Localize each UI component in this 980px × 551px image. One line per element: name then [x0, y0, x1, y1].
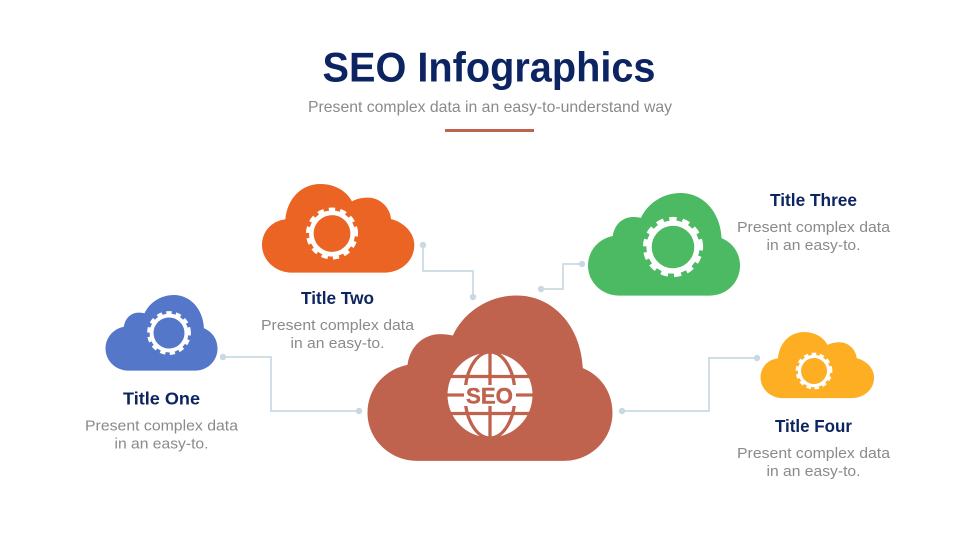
- text block: title four: [737, 416, 891, 480]
- icon: globe: SEO: [466, 384, 513, 408]
- text block: title one: in an easy-to.: [114, 436, 208, 452]
- text block: title two: in an easy-to.: [290, 335, 384, 352]
- icon: globe: [447, 352, 533, 438]
- text block: title one: Present complex data: [85, 418, 239, 434]
- cloud four (yellow) with gear: [760, 332, 874, 398]
- text block: title four: Present complex data: [737, 445, 891, 462]
- title: SEO Infographics: [322, 44, 656, 90]
- text block: title two: Present complex data: [261, 317, 415, 334]
- title underline: [445, 129, 534, 132]
- center cloud with SEO globe: [368, 296, 612, 461]
- text block: title four: in an easy-to.: [766, 463, 860, 480]
- text block: title one: [85, 388, 239, 452]
- connector: cloud one to center: [220, 354, 362, 414]
- text block: title three: Title Three: [770, 190, 857, 210]
- icon: gear: [305, 207, 359, 260]
- cloud three (green) with gear: [588, 193, 740, 296]
- icon: gear: [795, 352, 833, 390]
- connector: cloud two to center: [420, 242, 476, 300]
- connector: cloud three to center: [538, 261, 585, 292]
- text block: title two: Title Two: [301, 288, 374, 308]
- icon: gear: [642, 216, 704, 278]
- connector: cloud four to center: [619, 355, 760, 414]
- text block: title two: [261, 288, 415, 352]
- text block: title four: Title Four: [775, 416, 852, 436]
- icon: gear: [146, 310, 192, 356]
- cloud two (orange) with gear: [262, 184, 414, 273]
- cloud one (blue) with gear: [106, 295, 218, 371]
- text block: title three: [737, 190, 891, 254]
- text block: title one: Title One: [123, 388, 200, 408]
- text block: title three: Present complex data: [737, 219, 891, 236]
- subtitle: Present complex data in an easy-to-understand way: [308, 99, 672, 116]
- text block: title three: in an easy-to.: [766, 237, 860, 254]
